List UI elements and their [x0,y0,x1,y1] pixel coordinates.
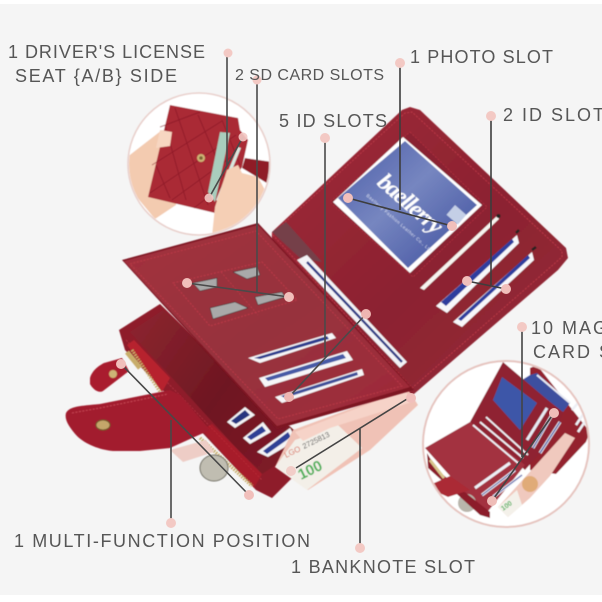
left flap [425,422,525,515]
callout: banknote slot [286,393,416,553]
inset circle: open wallet overview [423,361,590,527]
zipper upper [127,340,170,392]
label: photo slot: 1 PHOTO SLOT [410,47,553,67]
note value: 100 [500,500,514,513]
pocket cards [227,407,255,428]
note serial: LGO [283,444,302,460]
note strip [499,432,576,506]
callout: driver's license [204,48,248,202]
wallet: flap with SD slots and ID slots [122,223,414,429]
callout: 5 ID slots [284,133,371,402]
SD slots [193,278,217,291]
slot thin [420,216,499,290]
photo panel [470,362,547,470]
ID slot c [275,369,364,403]
label: SD card slots: 2 SD CARD SLOTS [235,67,384,84]
label: driver's license: 1 DRIVER'S LICENSE [8,42,205,62]
coin [170,440,228,481]
second wallet panel [530,365,590,474]
photo window [330,132,487,277]
zipper lower [202,424,262,488]
note value: 100 [295,457,325,484]
label: banknote slot: 1 BANKNOTE SLOT [291,557,475,577]
wallet: lower body [119,304,300,498]
banknote [275,388,418,490]
SD window [173,262,297,326]
snap tab [66,390,210,451]
slot blue 2 [453,252,534,327]
label: seat side: SEAT {A/B} SIDE [15,66,177,86]
card small print: Baellerry Fashion Leather Co., Ltd [365,193,433,253]
top white strip [0,0,602,4]
long side slot [297,255,407,368]
bottom white strip [0,595,602,602]
callout: 2 ID slots [462,111,511,294]
coin and tab [458,494,476,512]
snap strap [90,352,140,392]
callout: magnetic card slots [487,322,559,506]
ID slot a [248,333,336,363]
inner pocket shadow [272,222,322,262]
inset circle: wallet held in hands [126,93,272,236]
slot blue 1 [436,235,519,313]
wallet: open photo panel [270,107,568,395]
ID slot b [259,351,353,387]
callout: SD card slots [182,76,294,302]
card brand: baellerry [372,169,448,240]
callout: multi-function position [116,359,254,528]
label: multi-function: 1 MULTI-FUNCTION POSITION [14,531,310,551]
callout: photo slot [343,58,457,231]
banknote: 2725813 [301,430,331,451]
label: 5 ID slots: 5 ID SLOTS [279,111,387,131]
